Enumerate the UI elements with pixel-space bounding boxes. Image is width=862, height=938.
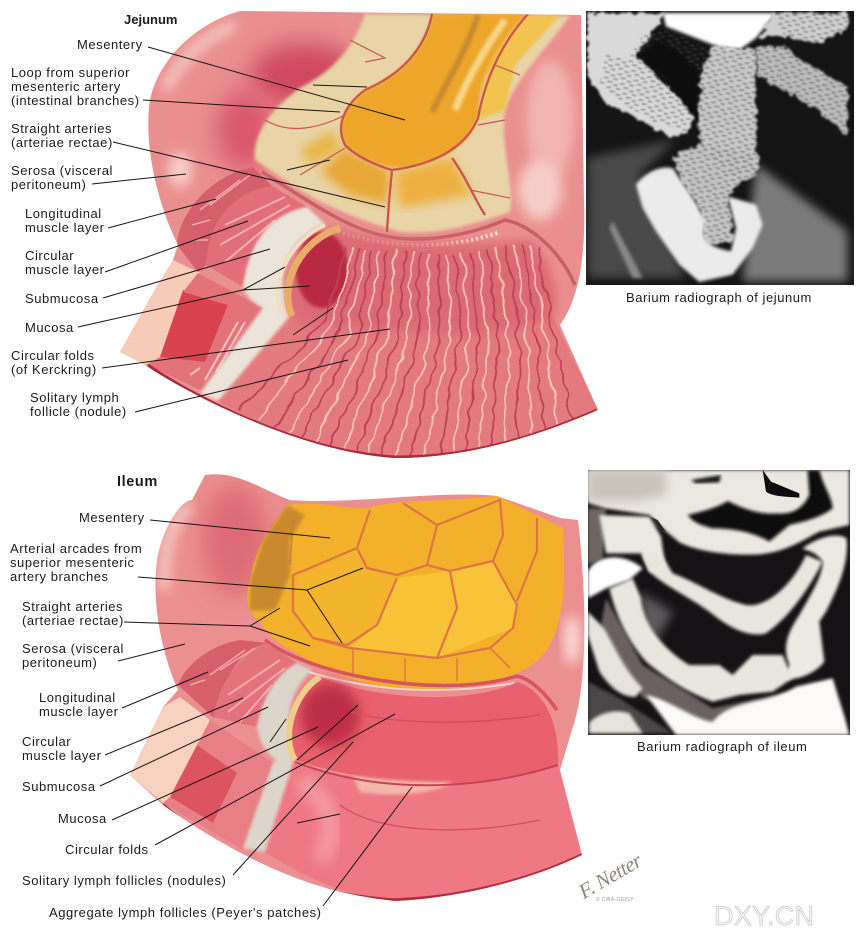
label: circular folds (ileum): Circular folds — [65, 842, 149, 857]
label: submucosa (ileum) — [22, 707, 268, 794]
label: arterial arcades: superior mesenteric — [10, 555, 135, 570]
label: Mesentery (jejunum) — [77, 37, 405, 120]
lower muscle: circular — [163, 720, 273, 850]
label: submucosa (ileum): Submucosa — [22, 779, 96, 794]
label: longitudinal muscle (jejunum) — [25, 199, 216, 235]
title: Ileum: Ileum — [117, 474, 158, 490]
lower-left band — [588, 612, 643, 697]
bottom white pool — [646, 678, 849, 735]
label: mucosa (ileum) — [58, 719, 318, 826]
label: circular folds of Kerckring: Circular folds — [11, 348, 95, 363]
label: straight arteries (ileum): (arteriae rectae) — [22, 613, 124, 628]
caption: ileum radiograph: Barium radiograph of ileum — [637, 739, 807, 754]
copyright: © CIBA-GEIGY — [596, 896, 634, 903]
label: Mesentery (jejunum): Mesentery — [77, 37, 143, 52]
label: mucosa (ileum): Mucosa — [58, 811, 107, 826]
label: longitudinal muscle (ileum) — [39, 672, 208, 719]
bottom rim — [163, 805, 582, 900]
label: serosa (ileum): peritoneum) — [22, 655, 97, 670]
radiograph: ileum — [588, 470, 850, 735]
label: straight arteries (jejunum): Straight arteries — [11, 121, 112, 136]
label: submucosa (jejunum) — [25, 249, 270, 306]
label: arterial arcades: Arterial arcades from — [10, 541, 142, 556]
radiograph: jejunum — [586, 11, 854, 285]
lower band — [609, 578, 793, 702]
label: arterial arcades: artery branches — [10, 569, 109, 584]
label: loop from superior mesenteric artery — [11, 65, 340, 112]
label: mucosa (jejunum): Mucosa — [25, 320, 74, 335]
mesentery: golden fat — [247, 496, 564, 689]
label: straight arteries (jejunum) — [11, 121, 385, 207]
lower muscle: circular — [148, 273, 263, 396]
Peyer's patch — [352, 776, 452, 794]
mottled loops — [588, 13, 694, 136]
submucosa — [243, 663, 312, 852]
lower cut: serosa flap — [120, 260, 200, 365]
white connecting loop — [599, 515, 666, 572]
lower muscle: red — [160, 290, 228, 362]
lower mucosa — [215, 313, 598, 458]
lumen gaps in top loop — [688, 470, 833, 542]
right band — [783, 536, 847, 679]
circular muscle — [213, 643, 297, 727]
label: longitudinal muscle (jejunum): Longitudinal — [25, 206, 102, 221]
label: solitary lymph follicle — [30, 360, 348, 419]
dark notch in upper-left loop — [636, 41, 699, 121]
label: serosa (jejunum): peritoneum) — [11, 177, 86, 192]
top white loop — [588, 470, 849, 555]
label: loop from superior mesenteric artery: Loop from superior — [11, 65, 130, 80]
label: longitudinal muscle (jejunum): muscle layer — [25, 220, 105, 235]
signature: F. Netter — [573, 848, 647, 904]
title: Jejunum: Jejunum — [124, 12, 177, 27]
label: mucosa (jejunum) — [25, 267, 310, 335]
submucosa — [200, 207, 325, 401]
mesentery: orange centre — [341, 14, 528, 168]
label: serosa (jejunum) — [11, 163, 186, 192]
label: circular folds of Kerckring — [11, 308, 390, 377]
label: straight arteries (ileum) — [22, 599, 310, 646]
label: serosa (jejunum): Serosa (visceral — [11, 163, 113, 178]
label: aggregate lymph follicles — [49, 787, 412, 920]
label: circular folds of Kerckring: (of Kerckring) — [11, 362, 97, 377]
longitudinal muscle — [178, 640, 267, 717]
lumen wall — [288, 678, 558, 783]
label: circular muscle (ileum) — [22, 698, 243, 763]
label: arterial arcades — [10, 541, 363, 643]
label: circular folds (ileum) — [65, 705, 395, 857]
bright blob left — [588, 557, 643, 598]
label: straight arteries (jejunum): (arteriae rectae) — [11, 135, 113, 150]
label: solitary lymph follicles: Solitary lymph follicles (nodules) — [22, 873, 226, 888]
label: loop from superior mesenteric artery: (intestinal branches) — [11, 93, 140, 108]
label: solitary lymph follicle: follicle (nodule) — [30, 404, 127, 419]
label: circular muscle (jejunum) — [25, 221, 248, 277]
grey tones — [588, 508, 606, 565]
label: serosa (ileum): Serosa (visceral — [22, 641, 124, 656]
lower mucosa — [262, 762, 582, 901]
bottom-left blob — [589, 711, 643, 733]
longitudinal muscle — [177, 167, 272, 272]
mesenteric border — [265, 640, 557, 710]
mottling specks — [599, 13, 848, 245]
cut rim of mesenteric border — [262, 172, 575, 285]
watermark: DXY.CN — [714, 901, 814, 931]
label: submucosa (jejunum): Submucosa — [25, 291, 99, 306]
label: serosa (ileum) — [22, 641, 185, 670]
label: solitary lymph follicles — [22, 742, 353, 888]
illustration: ileum cross-section — [125, 465, 590, 910]
grey soft-tissue areas — [588, 140, 686, 278]
circular muscle — [206, 186, 307, 287]
label: circular muscle (ileum): muscle layer — [22, 748, 102, 763]
label: longitudinal muscle (ileum): muscle layer — [39, 704, 119, 719]
mesentery: brown shaded folds — [250, 505, 305, 611]
mesentery: pale fat — [255, 14, 570, 233]
bright barium pool — [636, 167, 763, 282]
label: circular muscle (ileum): Circular — [22, 734, 71, 749]
label: aggregate lymph follicles: Aggregate lymph follicles (Peyer's patches) — [49, 905, 322, 920]
serrated fringe — [338, 232, 500, 246]
bottom rim — [148, 365, 597, 457]
mucosal folds — [240, 245, 572, 458]
label: circular muscle (jejunum): Circular — [25, 248, 74, 263]
label: straight arteries (ileum): Straight arteries — [22, 599, 123, 614]
lower muscle: red — [170, 745, 237, 823]
central U band — [643, 548, 823, 634]
label: solitary lymph follicle: Solitary lymph — [30, 390, 119, 405]
caption: jejunum radiograph: Barium radiograph of jejunum — [626, 290, 812, 305]
label: loop from superior mesenteric artery: mesenteric artery — [11, 79, 121, 94]
fold line — [295, 762, 558, 785]
lower cut: serosa flap — [130, 697, 210, 803]
bright pool at top — [663, 13, 776, 55]
label: longitudinal muscle (ileum): Longitudinal — [39, 690, 116, 705]
label: Mesentery (ileum): Mesentery — [79, 510, 145, 525]
mucosal lumen — [287, 228, 556, 335]
illustration: jejunum cross-section — [110, 5, 605, 465]
label: Mesentery (ileum) — [79, 510, 330, 538]
label: circular muscle (jejunum): muscle layer — [25, 262, 105, 277]
